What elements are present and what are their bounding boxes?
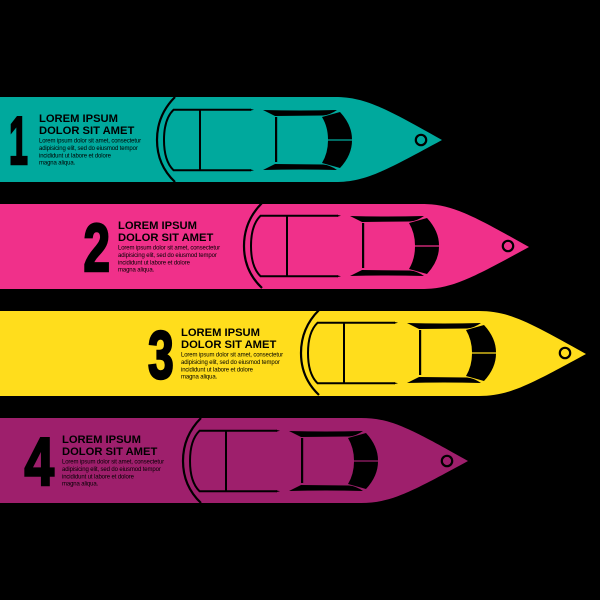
- body text: Lorem ipsum dolor sit amet, consectetur: [181, 352, 283, 358]
- heading: LOREM IPSUM: [39, 113, 118, 125]
- body text: magna aliqua.: [62, 482, 99, 488]
- heading: DOLOR SIT AMET: [181, 339, 276, 351]
- car icon: [301, 310, 570, 395]
- body text: adipisicing elit, sed do eiusmod tempor: [39, 146, 138, 152]
- body text: adipisicing elit, sed do eiusmod tempor: [118, 253, 217, 259]
- number 3: 3: [148, 317, 174, 393]
- banner shape: [0, 97, 442, 182]
- banner 4: purple: [0, 418, 468, 503]
- banner 2: pink: [0, 203, 529, 289]
- body text: magna aliqua.: [181, 374, 218, 380]
- body text: adipisicing elit, sed do eiusmod tempor: [181, 360, 280, 366]
- heading: LOREM IPSUM: [181, 327, 260, 339]
- heading: LOREM IPSUM: [62, 434, 141, 446]
- heading: LOREM IPSUM: [118, 220, 197, 232]
- number 1: 1: [9, 103, 28, 179]
- heading: DOLOR SIT AMET: [118, 232, 213, 244]
- car icon: [244, 203, 513, 288]
- banner shape: [0, 418, 468, 503]
- banner 1: teal: [0, 97, 442, 182]
- body text: Lorem ipsum dolor sit amet, consectetur: [62, 460, 164, 466]
- body text: magna aliqua.: [39, 160, 76, 166]
- car icon: [183, 418, 452, 503]
- heading: DOLOR SIT AMET: [39, 125, 134, 137]
- body text: Lorem ipsum dolor sit amet, consectetur: [39, 138, 141, 144]
- number 4: 4: [24, 424, 54, 499]
- body text: adipisicing elit, sed do eiusmod tempor: [62, 467, 161, 473]
- body text: incididunt ut labore et dolore: [62, 474, 135, 480]
- banner shape: [0, 311, 586, 396]
- body text: incididunt ut labore et dolore: [181, 368, 254, 374]
- car icon: [157, 97, 426, 182]
- heading: DOLOR SIT AMET: [62, 446, 157, 458]
- banner shape: [0, 204, 529, 289]
- body text: magna aliqua.: [118, 268, 155, 274]
- body text: incididunt ut labore et dolore: [39, 154, 112, 160]
- body text: Lorem ipsum dolor sit amet, consectetur: [118, 246, 220, 252]
- body text: incididunt ut labore et dolore: [118, 260, 191, 266]
- banner 3: yellow: [0, 310, 586, 396]
- number 2: 2: [84, 211, 110, 286]
